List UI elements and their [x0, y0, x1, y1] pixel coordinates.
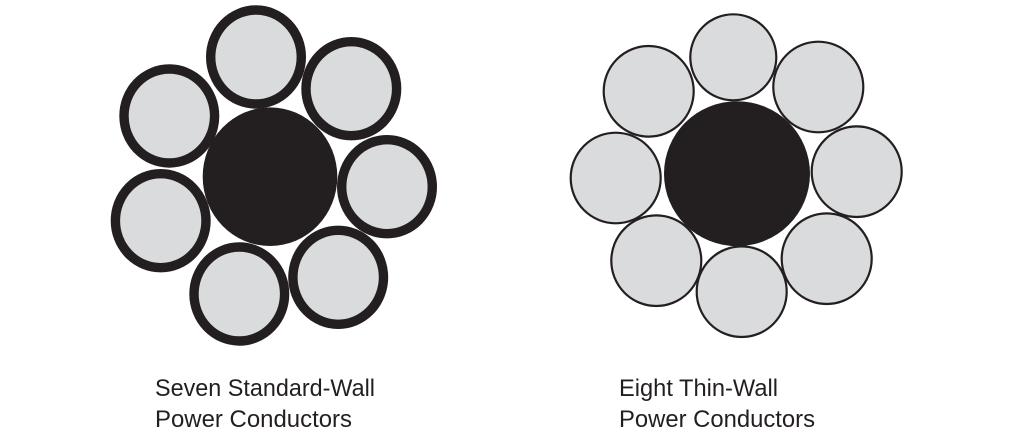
conductor: bottom — [194, 247, 285, 341]
center core — [203, 107, 337, 246]
diagram: eight thin-wall conductors — [571, 14, 902, 337]
conductor: lower right — [782, 213, 872, 304]
caption: eight thin-wall: Power Conductors — [619, 406, 815, 433]
conductor: upper right — [306, 42, 397, 136]
conductor: top — [211, 10, 301, 104]
conductor: upper left — [604, 46, 694, 137]
conductor: right — [342, 140, 432, 234]
conductor: upper left — [124, 69, 215, 163]
conductor: lower left — [611, 215, 701, 306]
conductor: upper right — [773, 42, 863, 132]
conductor: top — [690, 14, 776, 100]
caption: seven standard-wall: Seven Standard-Wall — [155, 375, 375, 402]
conductor: bottom — [697, 246, 787, 337]
caption: seven standard-wall — [155, 375, 375, 433]
caption: eight thin-wall — [619, 375, 815, 433]
conductor: lower right — [293, 230, 384, 324]
conductor: right — [812, 126, 902, 217]
conductor: lower left — [115, 174, 206, 268]
caption: eight thin-wall: Eight Thin-Wall — [619, 375, 778, 402]
conductor: left — [571, 133, 661, 223]
center core — [664, 101, 810, 246]
diagram: seven standard-wall conductors — [115, 10, 432, 341]
caption: seven standard-wall: Power Conductors — [155, 406, 352, 433]
